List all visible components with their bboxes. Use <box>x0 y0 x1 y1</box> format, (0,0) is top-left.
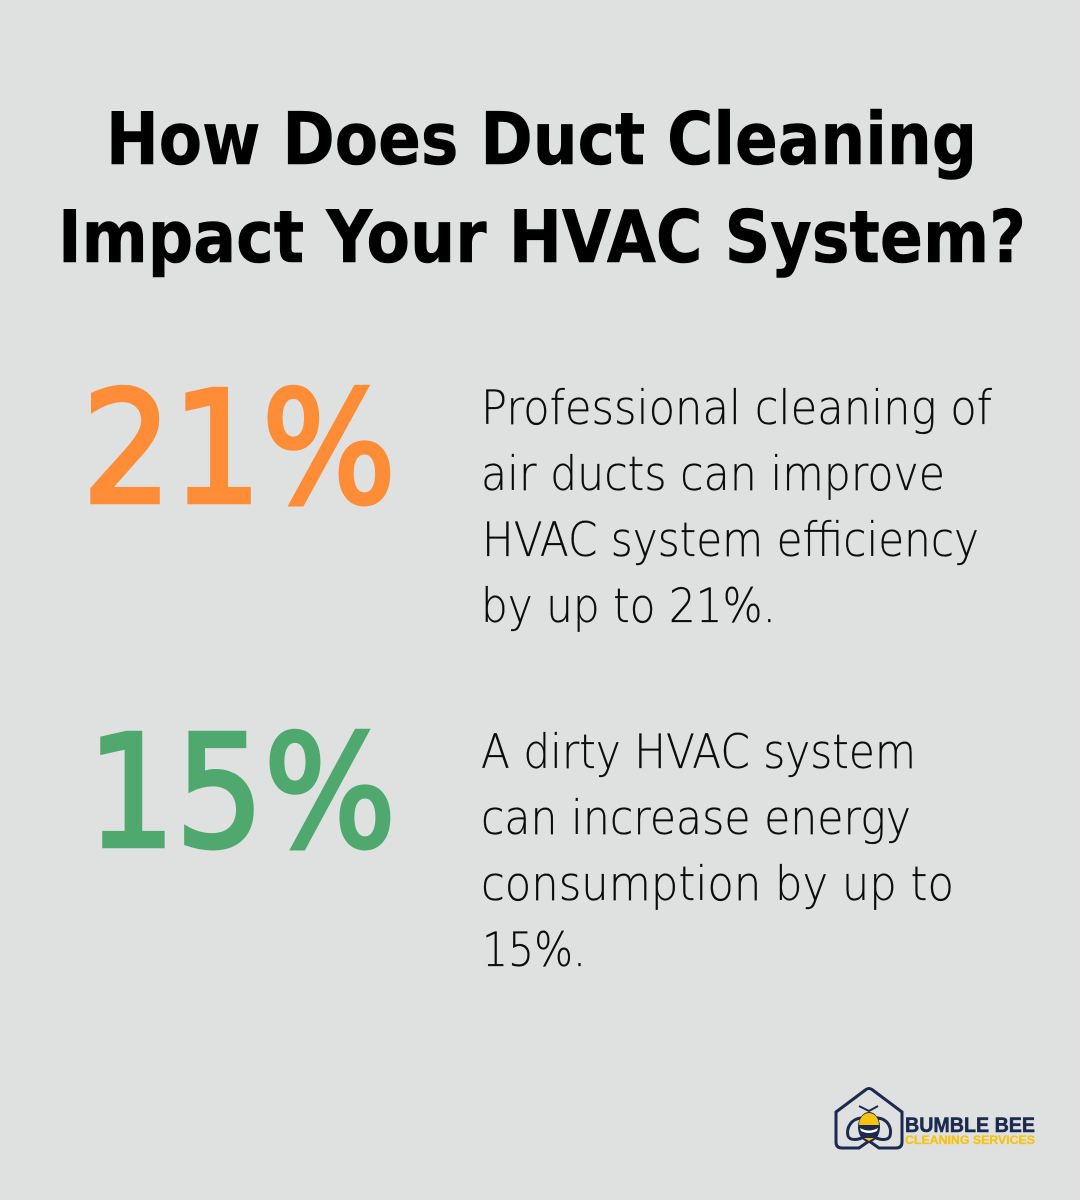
text block: 21% description: air ducts can improve <box>481 447 945 502</box>
text block: 21% description <box>481 381 992 634</box>
logo tagline: CLEANING SERVICES <box>905 1133 1035 1147</box>
text block: 21% description: HVAC system efficiency <box>482 513 979 568</box>
text block: 21% description: by up to 21%. <box>481 579 776 634</box>
text block: 15% description: can increase energy <box>481 791 911 846</box>
logo: Bumble Bee Cleaning Services <box>836 1088 1035 1148</box>
icon: house with bee <box>836 1088 902 1148</box>
statistic: 21%: 21% <box>82 358 396 539</box>
statistic: 15%: 15% <box>87 702 396 883</box>
text block: 15% description: consumption by up to <box>481 857 954 912</box>
title: How Does Duct Cleaning <box>106 97 977 181</box>
text block: 21% description: Professional cleaning of <box>481 381 992 436</box>
text block: 15% description: 15%. <box>482 923 586 978</box>
text block: 15% description <box>481 725 954 978</box>
text block: 15% description: A dirty HVAC system <box>481 725 916 780</box>
logo wordmark: BUMBLE BEE <box>905 1114 1035 1137</box>
title <box>58 97 1026 279</box>
